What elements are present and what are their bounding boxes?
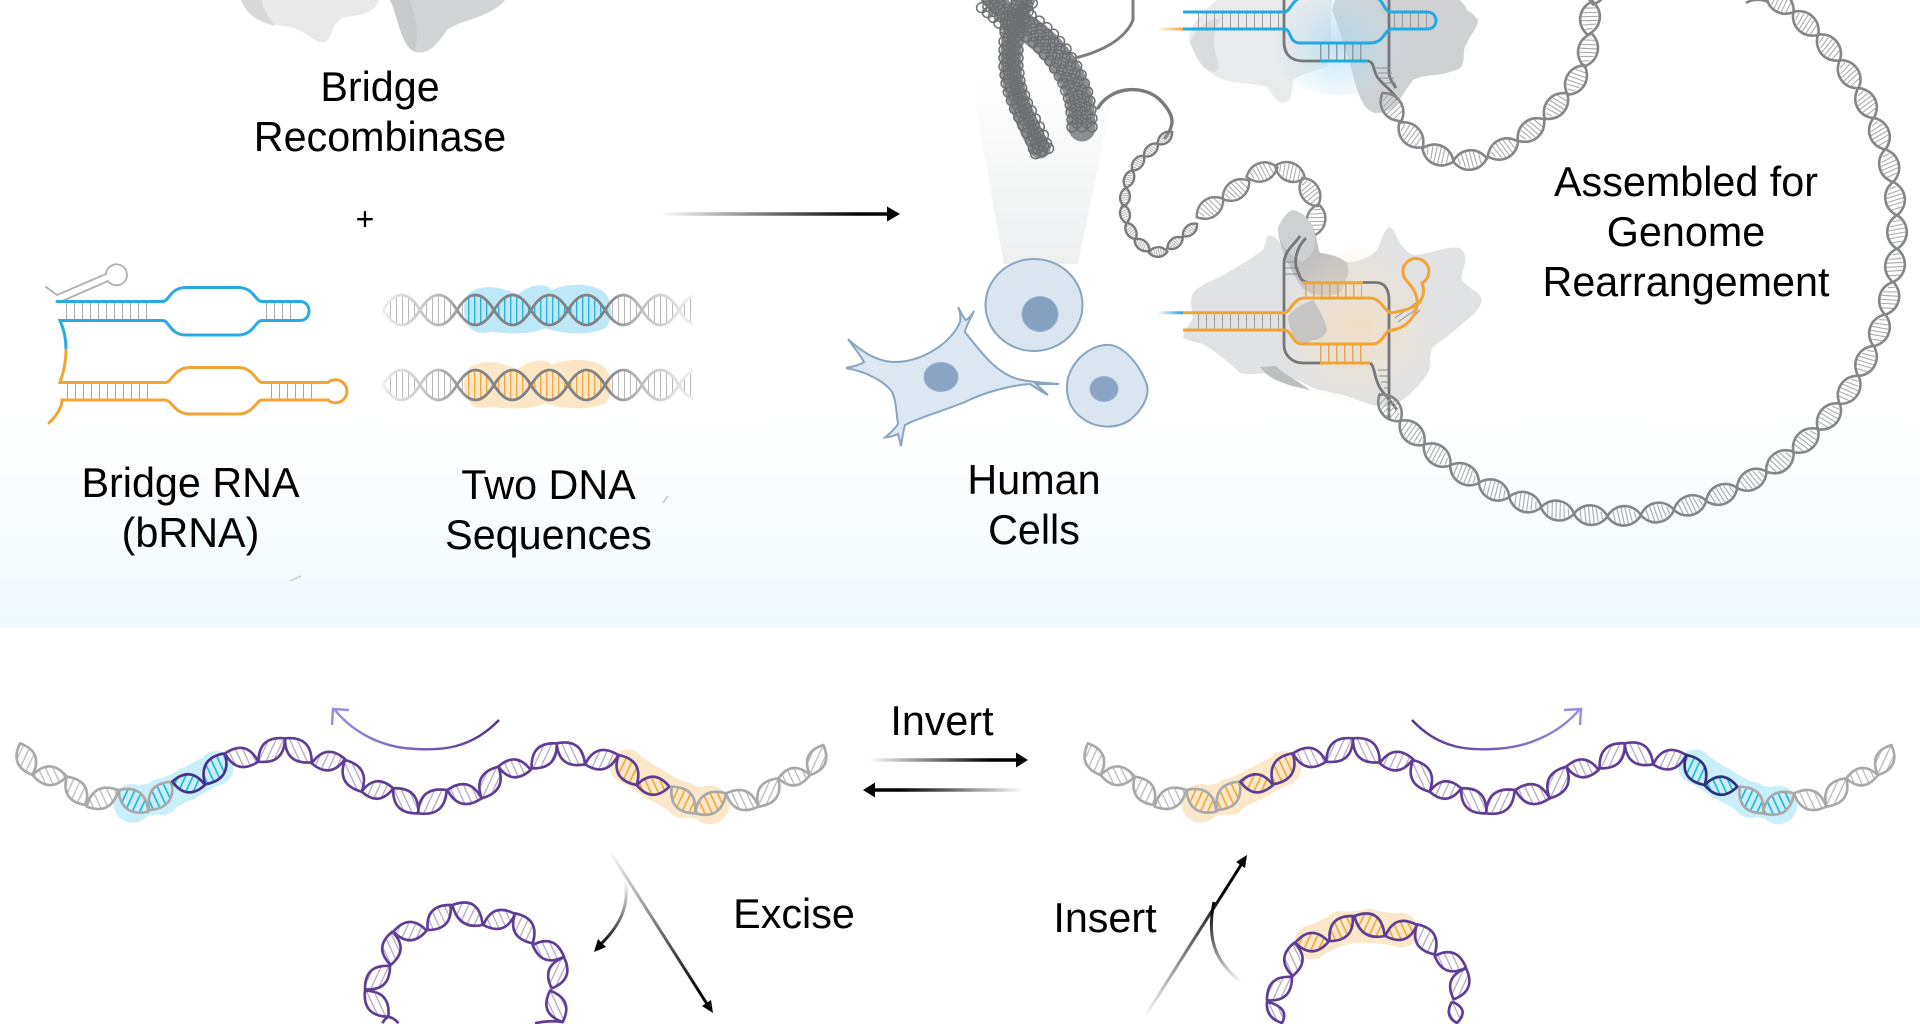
label: bridge RNA: (bRNA) [122, 510, 259, 556]
label: bridge recombinase: Bridge [320, 64, 440, 110]
label: excise: Excise [733, 891, 855, 937]
label: two DNA sequences: Two DNA [461, 462, 636, 508]
arrow: into human cells [660, 206, 900, 222]
icon: human cells [846, 259, 1148, 446]
plus sign: + [356, 201, 374, 237]
arrow: excise curved [594, 880, 626, 952]
label: assembled for genome rearrangement: Genome [1607, 209, 1765, 255]
label: bridge recombinase: Recombinase [254, 114, 506, 160]
icon: target DNA with orange site [383, 360, 716, 408]
complex: blue target site [1157, 0, 1478, 113]
icon: bridge RNA [46, 264, 347, 423]
icon: target DNA with blue site [383, 285, 716, 333]
arrow: excise straight [609, 850, 713, 1013]
icon: chromosome [988, 0, 1172, 151]
label: insert: Insert [1053, 895, 1157, 941]
panel: assembly background [0, 0, 1920, 628]
label: bridge RNA: Bridge RNA [81, 460, 300, 506]
dna: upper strand leaving blue complex [1392, 0, 1597, 160]
dna: strand from chromosome to lower complex [1125, 138, 1316, 252]
label: invert: Invert [890, 698, 994, 744]
zoom cone from cell to chromosome [970, 75, 1117, 264]
arrow: insert curved [1211, 902, 1242, 983]
label: assembled for genome rearrangement: Rearrangement [1543, 259, 1830, 305]
label: human cells: Cells [988, 507, 1080, 553]
arrow: left inversion curve [332, 709, 499, 749]
dna: linear genome after inversion [1085, 738, 1894, 824]
label: human cells: Human [967, 457, 1101, 503]
arrow: invert forward [868, 752, 1028, 768]
label: assembled for genome rearrangement: Assembled for [1554, 159, 1818, 205]
arrow: invert reverse [863, 782, 1024, 798]
stray marks [290, 496, 668, 581]
dna: excised circle [365, 902, 567, 1023]
arrow: right inversion curve [1412, 709, 1581, 749]
dna: large circular strand [1372, 0, 1907, 526]
icon: bridge recombinase protein [241, 0, 505, 53]
dna: linear genome before inversion [17, 738, 826, 824]
label: two DNA sequences: Sequences [445, 512, 652, 558]
complex: orange target site [1157, 210, 1482, 420]
arrow: insert straight [1144, 855, 1247, 1018]
dna: circle for insertion [1267, 909, 1469, 1023]
